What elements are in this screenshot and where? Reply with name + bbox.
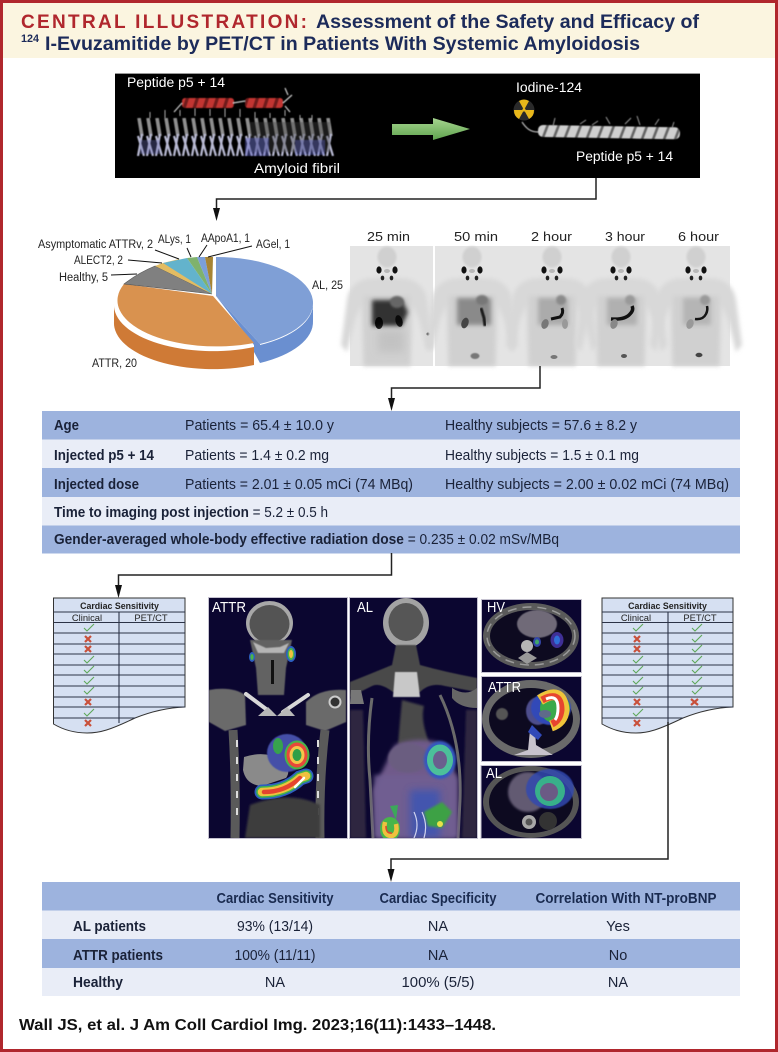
checklist heading: Cardiac Sensitivity: [628, 601, 707, 611]
row: time to imaging: Time to imaging post injection = 5.2 ± 0.5 h: [54, 505, 328, 521]
pie labels: AApoA1, 1: [201, 233, 250, 245]
slice: healthy 5: [124, 266, 212, 294]
header row: Cardiac Specificity: [380, 891, 496, 907]
arrow: black panel to pie: [213, 178, 596, 221]
PET body 50 min: [426, 246, 518, 366]
arrow: table to left checklist: [115, 553, 392, 598]
citation: Wall JS, et al. J Am Coll Cardiol Img. 2023;16(11):1433–1448.: [19, 1017, 496, 1034]
row: radiation dose: Gender-averaged whole-body effective radiation dose = 0.235 ± 0.02 mSv/MBq: [54, 532, 559, 548]
label: AL axial: AL: [486, 766, 502, 782]
row: healthy: Healthy: [73, 975, 123, 991]
row: age: Healthy subjects = 57.6 ± 8.2 y: [445, 418, 638, 434]
row: injected p5+14: Patients = 1.4 ± 0.2 mg: [185, 448, 329, 464]
row: age: [54, 418, 638, 434]
label: iodine-124: Iodine-124: [516, 80, 582, 95]
x marks: [634, 636, 698, 726]
time labels: [367, 229, 720, 244]
row: injected p5+14: [54, 448, 639, 464]
title banner: 124: [21, 33, 40, 45]
header row: Correlation With NT-proBNP: [536, 891, 717, 907]
checklist: clinical and PET/CT: [602, 598, 733, 733]
icon: amyloid fibril: [137, 108, 335, 156]
check marks: [84, 624, 94, 716]
label: peptide p5+14: Peptide p5 + 14: [127, 75, 225, 90]
pie chart: patient groups: [38, 233, 343, 370]
label: HV: HV: [487, 600, 505, 616]
row: AL patients: Yes: [606, 919, 630, 935]
scan: AL coronal PET/CT: [350, 598, 478, 841]
row: injected dose: Patients = 2.01 ± 0.05 mCi (74 MBq): [185, 477, 413, 493]
label: peptide p5+14 right: Peptide p5 + 14: [576, 149, 673, 164]
pie labels: AL, 25: [312, 280, 343, 292]
label: AL: AL: [357, 600, 373, 616]
row: AL patients: [73, 919, 630, 935]
slice wedge edge AL: [216, 296, 260, 363]
panel: peptide and amyloid fibril: [115, 73, 700, 178]
arrow: right checklist to results table: [388, 722, 668, 882]
pie labels: ATTR, 20: [92, 358, 137, 370]
scan: AL axial: [481, 766, 582, 838]
table: cardiac results: [42, 882, 740, 996]
scan: ATTR axial: [482, 676, 582, 762]
arrow: green: [392, 118, 470, 140]
slice side: ATTR: [114, 304, 254, 369]
column head: clinical: Clinical: [621, 612, 651, 623]
label: amyloid fibril: Amyloid fibril: [254, 161, 340, 176]
column head: PET/CT: PET/CT: [683, 612, 717, 623]
pie labels: Asymptomatic ATTRv, 2: [38, 239, 153, 251]
row: ATTR patients: NA: [428, 948, 448, 964]
checklist heading: Cardiac Sensitivity: [80, 601, 159, 611]
time labels: 50 min: [454, 229, 498, 244]
row: healthy: 100% (5/5): [402, 975, 474, 991]
header row: [216, 891, 717, 907]
column head: PET/CT: PET/CT: [134, 612, 168, 623]
row: ATTR patients: No: [609, 948, 627, 964]
slice side: AL: [260, 303, 313, 363]
scan: ATTR coronal PET/CT: [208, 598, 348, 838]
row: injected dose: [54, 477, 729, 493]
slice: AApoA1 1: [197, 257, 212, 294]
slice: AGel 1: [205, 257, 213, 294]
row: injected dose: Injected dose: [54, 477, 139, 493]
row: age: Patients = 65.4 ± 10.0 y: [185, 418, 335, 434]
x marks: [85, 636, 91, 726]
scan: HV axial: [482, 600, 582, 672]
row: injected p5+14: Healthy subjects = 1.5 ± 0.1 mg: [445, 448, 639, 464]
icon: white helix peptide: [522, 116, 680, 139]
pie labels: Healthy, 5: [59, 272, 108, 284]
row: injected p5+14: Injected p5 + 14: [54, 448, 154, 464]
title banner: I-Evuzamitide by PET/CT in Patients With Systemic Amyloidosis: [45, 34, 640, 55]
check marks: [633, 624, 702, 716]
icon: red helix peptide: [174, 88, 292, 112]
slice: ALys 1: [187, 257, 212, 294]
PET body 6 hour: [650, 246, 742, 366]
column head: clinical: Clinical: [72, 612, 102, 623]
time labels: 2 hour: [531, 229, 573, 244]
row: AL patients: 93% (13/14): [237, 919, 313, 935]
row: ATTR patients: [73, 948, 627, 964]
checklist: clinical only: [54, 598, 185, 733]
arrow: PET to summary table: [388, 366, 540, 411]
row: AL patients: NA: [428, 919, 448, 935]
row: healthy: NA: [608, 975, 628, 991]
row: healthy: NA: [265, 975, 285, 991]
header row: Cardiac Sensitivity: [216, 891, 334, 907]
time labels: 25 min: [367, 229, 410, 244]
PET body 2 hour: [506, 246, 598, 366]
PET body 3 hour: [575, 246, 667, 366]
pie labels: ALECT2, 2: [74, 255, 123, 267]
title banner: CENTRAL ILLUSTRATION:: [21, 12, 307, 33]
slice: AL 25: [216, 257, 313, 344]
panel: PET whole-body time series: [341, 229, 742, 366]
label: ATTR axial: ATTR: [488, 680, 521, 696]
table: dosing summary: [42, 411, 740, 554]
time labels: 6 hour: [678, 229, 720, 244]
icon: radiation symbol: [514, 100, 534, 120]
leader lines: [111, 245, 252, 275]
row: injected dose: Healthy subjects = 2.00 ± 0.02 mCi (74 MBq): [445, 477, 729, 493]
row: AL patients: AL patients: [73, 919, 146, 935]
slice: asymptomatic ATTRv 2: [163, 258, 212, 294]
slice: ATTR 20: [117, 284, 254, 346]
row: healthy: [73, 975, 628, 991]
pie labels: AGel, 1: [256, 239, 290, 251]
row: ATTR patients: 100% (11/11): [234, 948, 316, 964]
label: ATTR: ATTR: [212, 600, 246, 616]
pie labels: [38, 233, 343, 370]
slice: ALECT2 2: [155, 259, 212, 294]
time labels: 3 hour: [605, 229, 646, 244]
title banner: [3, 3, 775, 58]
row: ATTR patients: ATTR patients: [73, 948, 163, 964]
pie labels: ALys, 1: [158, 234, 191, 246]
title banner: Assessment of the Safety and Efficacy of: [316, 12, 700, 33]
PET body 25 min: [341, 246, 433, 366]
row: age: Age: [54, 418, 79, 434]
